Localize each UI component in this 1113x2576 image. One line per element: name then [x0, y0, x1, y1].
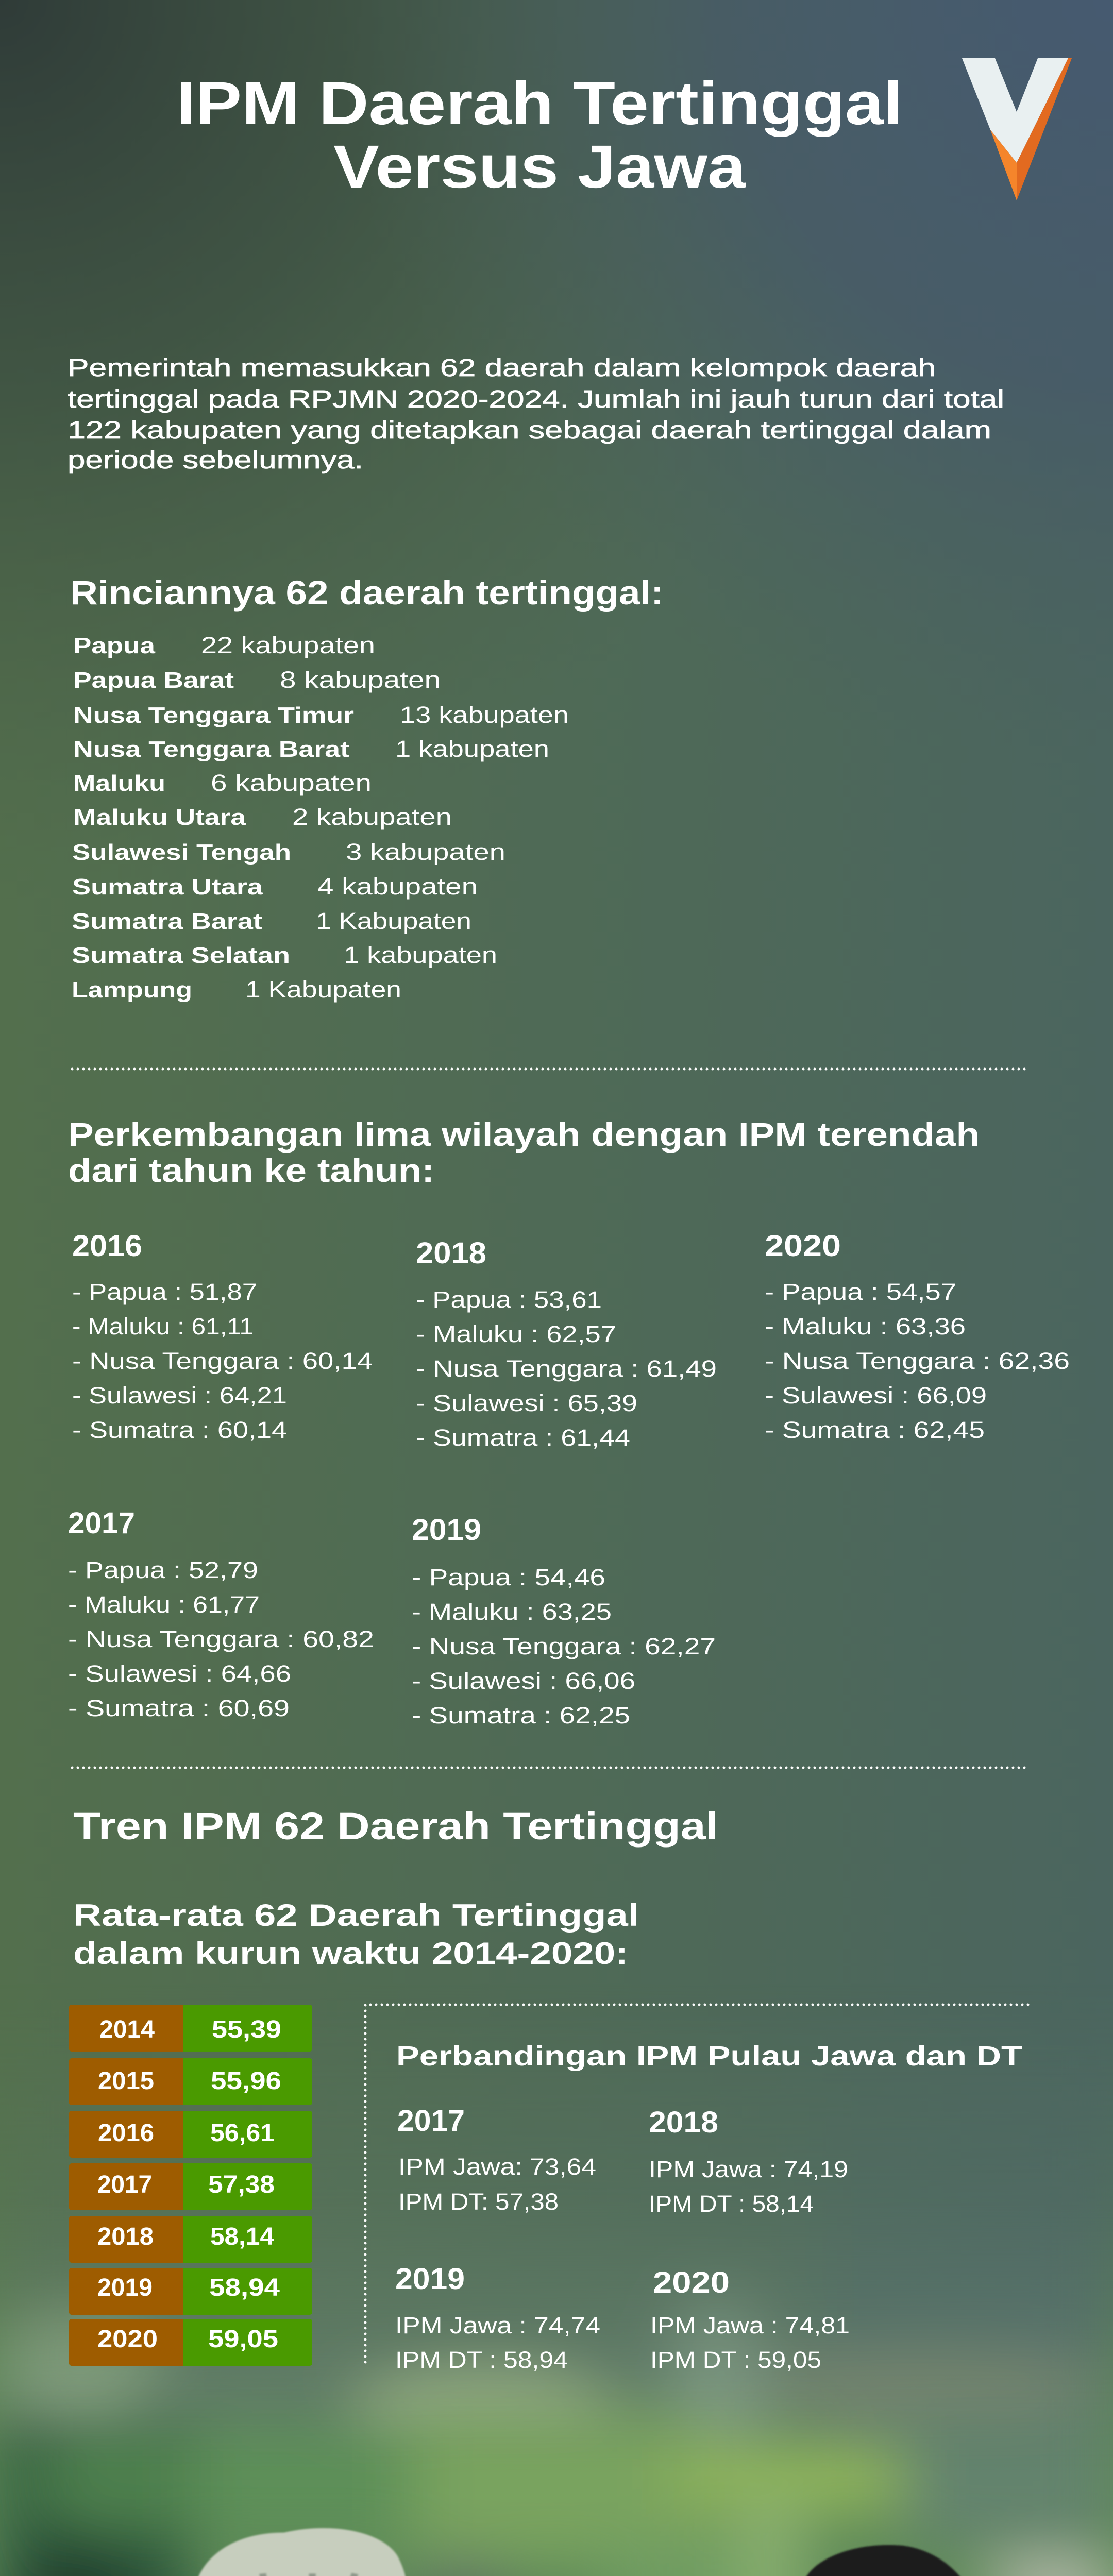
list of provinces: Nusa Tenggara Timur: [73, 703, 354, 728]
year 2019: - Nusa Tenggara : 62,27: [412, 1633, 716, 1659]
list of provinces: Papua: [73, 633, 156, 658]
intro paragraph: periode sebelumnya.: [68, 447, 363, 474]
year 2018: [416, 1236, 717, 1451]
year 2020: - Nusa Tenggara : 62,36: [765, 1348, 1070, 1374]
comparison 2019: [395, 2262, 600, 2373]
woman: [197, 2527, 407, 2576]
year 2019: - Sulawesi : 66,06: [412, 1668, 635, 1694]
year 2019: - Sumatra : 62,25: [412, 1702, 630, 1728]
year 2019: - Papua : 54,46: [412, 1564, 605, 1590]
title: IPM Daerah Tertinggal: [176, 70, 903, 138]
list of provinces: Sumatra Selatan: [72, 943, 290, 968]
list of provinces: 1 kabupaten: [344, 942, 497, 968]
list of provinces: Maluku Utara: [73, 805, 246, 830]
comparison 2017: 2017: [397, 2104, 465, 2138]
row 2016: [69, 2111, 312, 2158]
year 2017: - Sumatra : 60,69: [68, 1695, 290, 1721]
row 2019: 2019: [97, 2274, 153, 2301]
year 2020: 2020: [765, 1229, 841, 1263]
year 2018: - Sumatra : 61,44: [416, 1425, 630, 1451]
comparison 2019: IPM DT : 58,94: [395, 2347, 568, 2373]
year 2018: 2018: [416, 1236, 486, 1270]
year 2016: [72, 1229, 373, 1443]
list of provinces: Papua Barat: [73, 668, 234, 693]
comparison 2017: [397, 2104, 596, 2215]
row 2020: 59,05: [208, 2326, 278, 2353]
row 2015: [69, 2058, 312, 2105]
comparison 2018: IPM DT : 58,14: [649, 2191, 814, 2217]
hair: [185, 2528, 407, 2576]
list of provinces: 3 kabupaten: [346, 839, 505, 865]
list of provinces: Sulawesi Tengah: [72, 840, 291, 865]
comparison 2018: [649, 2106, 848, 2217]
heading: [68, 1116, 980, 1189]
year 2019: 2019: [412, 1513, 481, 1547]
heading: Perkembangan lima wilayah dengan IPM terendah: [68, 1116, 980, 1153]
row 2014: [69, 2005, 312, 2052]
row 2017: 2017: [97, 2171, 152, 2198]
list of provinces: 22 kabupaten: [201, 632, 375, 658]
heading: rata-rata: dalam kurun waktu 2014-2020:: [73, 1936, 628, 1971]
row 2015: 55,96: [211, 2067, 281, 2095]
year 2016: - Sulawesi : 64,21: [72, 1382, 287, 1409]
row 2015: 2015: [98, 2067, 154, 2095]
heading: Rinciannya 62 daerah tertinggal:: [70, 573, 664, 612]
list of provinces: Maluku: [73, 771, 165, 796]
list of provinces: 8 kabupaten: [280, 667, 441, 693]
panel: perbandingan IPM Jawa dan DT: [365, 2005, 1028, 2373]
year 2016: - Nusa Tenggara : 60,14: [72, 1348, 373, 1374]
comparison 2018: 2018: [649, 2106, 718, 2139]
comparison 2017: IPM Jawa: 73,64: [398, 2154, 596, 2180]
row 2017: [69, 2163, 312, 2210]
intro paragraph: 122 kabupaten yang ditetapkan sebagai daerah tertinggal dalam: [68, 417, 991, 444]
list of provinces: 1 kabupaten: [395, 736, 549, 762]
row 2019: 58,94: [209, 2274, 280, 2301]
title: [176, 70, 903, 201]
year 2018: - Maluku : 62,57: [416, 1321, 616, 1347]
list of provinces: 1 Kabupaten: [245, 976, 401, 1003]
photo: elderly woman and boy with laptop on grass: [0, 2213, 1113, 2576]
row 2018: 58,14: [210, 2223, 274, 2250]
intro paragraph: [68, 354, 1004, 474]
year 2020: - Papua : 54,57: [765, 1279, 956, 1305]
year 2017: [68, 1506, 374, 1721]
year 2017: - Nusa Tenggara : 60,82: [68, 1626, 374, 1652]
list of provinces: Nusa Tenggara Barat: [73, 737, 349, 762]
comparison 2020: [650, 2266, 850, 2373]
comparison 2020: 2020: [653, 2266, 730, 2299]
row 2017: 57,38: [208, 2171, 275, 2198]
hair: [802, 2545, 981, 2576]
year 2017: - Sulawesi : 64,66: [68, 1660, 291, 1687]
heading: rata-rata: [73, 1898, 639, 1971]
row 2018: 2018: [97, 2223, 154, 2250]
year 2019: - Maluku : 63,25: [412, 1599, 612, 1625]
list of provinces: Lampung: [72, 977, 192, 1003]
year 2016: 2016: [72, 1229, 142, 1263]
panel heading: Perbandingan IPM Pulau Jawa dan DT: [396, 2041, 1022, 2072]
year 2020: - Sulawesi : 66,09: [765, 1382, 987, 1409]
row 2014: 2014: [99, 2016, 155, 2043]
row 2018: [69, 2216, 312, 2263]
heading: dari tahun ke tahun:: [68, 1152, 434, 1189]
heading: rata-rata: Rata-rata 62 Daerah Tertinggal: [73, 1898, 639, 1933]
row 2016: 56,61: [210, 2120, 275, 2147]
title: Versus Jawa: [333, 133, 747, 201]
row 2016: 2016: [98, 2120, 154, 2147]
list of provinces: [72, 632, 569, 1003]
intro paragraph: Pemerintah memasukkan 62 daerah dalam kelompok daerah: [68, 354, 936, 382]
year 2019: [412, 1513, 716, 1728]
year 2018: - Papua : 53,61: [416, 1286, 602, 1313]
year 2017: - Papua : 52,79: [68, 1557, 258, 1583]
logo: V mark: [962, 58, 1072, 200]
year 2016: - Papua : 51,87: [72, 1279, 257, 1305]
year 2018: - Nusa Tenggara : 61,49: [416, 1355, 717, 1382]
row 2019: [69, 2268, 312, 2315]
heading: tren IPM: Tren IPM 62 Daerah Tertinggal: [73, 1805, 718, 1848]
year 2018: - Sulawesi : 65,39: [416, 1390, 637, 1416]
list of provinces: 4 kabupaten: [317, 873, 478, 900]
comparison 2017: IPM DT: 57,38: [398, 2189, 559, 2215]
year 2016: - Maluku : 61,11: [72, 1313, 254, 1340]
comparison 2019: IPM Jawa : 74,74: [395, 2312, 600, 2338]
blurred background foliage: [0, 2228, 1113, 2576]
row 2020: 2020: [97, 2326, 158, 2353]
panel: perkembangan lima wilayah: [68, 1116, 1070, 1728]
year 2020: [765, 1229, 1070, 1443]
year 2016: - Sumatra : 60,14: [72, 1417, 287, 1443]
list of provinces: 2 kabupaten: [292, 804, 452, 830]
year 2020: - Maluku : 63,36: [765, 1313, 966, 1340]
row 2020: [69, 2319, 312, 2366]
panel: rincian 62 daerah tertinggal: [70, 573, 664, 1003]
list of provinces: 1 Kabupaten: [316, 908, 471, 934]
comparison 2019: 2019: [395, 2262, 465, 2296]
list of provinces: 6 kabupaten: [211, 770, 372, 796]
comparison 2020: IPM Jawa : 74,81: [650, 2312, 850, 2338]
table: rata-rata IPM 2014-2020: [69, 2005, 312, 2366]
year 2017: - Maluku : 61,77: [68, 1591, 260, 1618]
intro paragraph: tertinggal pada RPJMN 2020-2024. Jumlah ini jauh turun dari total: [68, 386, 1004, 413]
year 2020: - Sumatra : 62,45: [765, 1417, 985, 1443]
comparison 2018: IPM Jawa : 74,19: [649, 2156, 848, 2182]
list of provinces: 13 kabupaten: [400, 702, 569, 728]
list of provinces: Sumatra Utara: [72, 874, 263, 900]
row 2014: 55,39: [212, 2016, 281, 2043]
list of provinces: Sumatra Barat: [72, 909, 262, 934]
year 2017: 2017: [68, 1506, 135, 1540]
comparison 2020: IPM DT : 59,05: [650, 2347, 821, 2373]
boy: [805, 2544, 961, 2576]
